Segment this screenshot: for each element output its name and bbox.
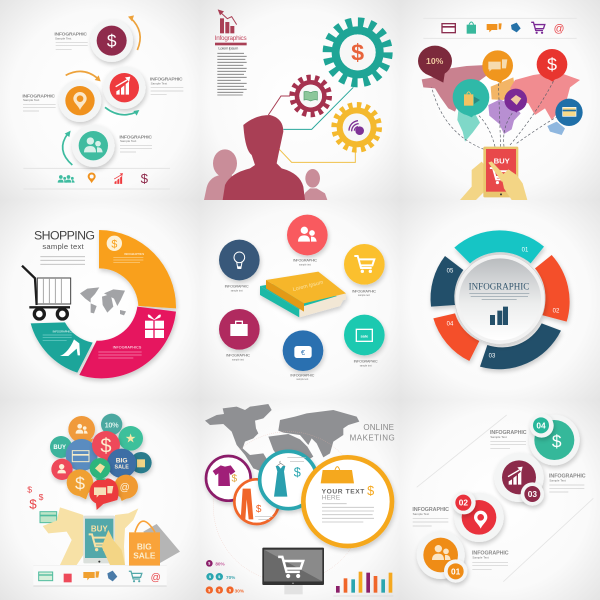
bubble: dollar: $ — [547, 55, 557, 75]
segment 02 — [535, 255, 570, 322]
label 03 — [549, 474, 586, 492]
bubble: dollar red: $ — [100, 435, 112, 457]
arrow: orange top — [128, 15, 140, 50]
circle: dollar: $ — [107, 31, 117, 51]
label: INFOGRAPHIC — [293, 259, 317, 263]
circle: dress: $ — [294, 466, 301, 480]
silhouette: main person — [223, 115, 305, 200]
shopping bags: SALE — [133, 551, 156, 561]
bubble: dollar — [537, 49, 567, 82]
tablet: BUY — [91, 525, 108, 534]
bubble: buy: BUY — [53, 445, 66, 451]
icon: shopping cart — [22, 266, 71, 319]
bubble: big sale — [107, 449, 136, 478]
book stack — [260, 272, 346, 317]
label — [226, 354, 250, 361]
legend — [206, 560, 245, 594]
panel: gears and silhouettes — [200, 0, 400, 200]
segment 04: 04 — [447, 321, 454, 327]
bubble: handshake — [504, 89, 527, 113]
circle 03: 03 — [528, 489, 537, 499]
text block: Lorem Ipsum — [218, 46, 239, 51]
icon row: $ — [141, 171, 149, 186]
world map — [205, 404, 359, 472]
label 1 — [54, 32, 88, 50]
connector lines — [268, 87, 355, 162]
segment: pink — [79, 307, 176, 378]
bubble: dollar orange — [67, 469, 93, 499]
label 01: Sample Text — [472, 556, 489, 560]
segment 05 — [431, 256, 463, 307]
label 4: Sample Text — [120, 139, 137, 143]
legend: $ — [208, 588, 210, 592]
label 2: INFOGRAPHIC — [150, 77, 183, 83]
gear: maroon book — [292, 78, 329, 114]
label 3 — [22, 93, 56, 111]
bubble: big sale: BIG — [116, 457, 128, 464]
label 03: INFOGRAPHIC — [549, 474, 586, 480]
bubble: 10%: 10% — [105, 420, 119, 429]
circle 01 — [417, 531, 467, 583]
label 01: INFOGRAPHIC — [472, 551, 509, 557]
bubble: bag — [453, 79, 489, 117]
label: INFOGRAPHIC — [226, 354, 250, 358]
label: INFOGRAPHIC — [352, 289, 376, 293]
circle: pin — [59, 79, 101, 122]
label 1: INFOGRAPHIC — [54, 32, 87, 38]
segment: pink: INFOGRAPHICS — [113, 345, 142, 349]
dollar signs: $ — [27, 485, 32, 495]
bubble: star: ★ — [125, 432, 136, 446]
circle 04: 04 — [536, 420, 546, 430]
circle: trousers: $ — [256, 504, 262, 515]
gear: yellow signal — [335, 106, 378, 149]
monitor — [262, 548, 324, 594]
segment 04 — [433, 313, 479, 361]
legend: 80% — [215, 561, 226, 566]
label 2 — [150, 77, 183, 94]
label 4 — [119, 134, 152, 152]
bubble: chat heart — [89, 478, 119, 510]
segment: orange: INFOGRAPHICS — [124, 252, 144, 256]
label: sample text — [232, 358, 244, 361]
legend: $ — [218, 588, 220, 592]
circle: shirt — [206, 456, 251, 501]
icon row — [442, 22, 564, 35]
bubble: person — [51, 459, 73, 480]
bubble: at sign: @ — [120, 482, 130, 493]
circle: euro case — [283, 330, 323, 371]
label: sample text — [360, 364, 372, 367]
circle 02: 02 — [459, 498, 468, 508]
centre hub: INFOGRAPHIC — [469, 281, 529, 291]
world map — [422, 65, 580, 142]
text block — [217, 46, 247, 95]
circle: trousers — [234, 479, 279, 524]
panel: circles around a book — [200, 200, 400, 400]
book stack: Lorem Ipsum — [292, 280, 324, 293]
segment: teal: INFOGRAPHICS — [53, 329, 73, 333]
label: sample text — [299, 263, 311, 266]
label 04: Sample Text — [490, 435, 507, 439]
segment 01 — [454, 230, 544, 263]
arrow: orange middle — [66, 71, 101, 81]
segment 01: 01 — [522, 248, 529, 254]
silhouette: right person — [302, 169, 327, 200]
circle: chart — [103, 66, 146, 109]
label 01 — [472, 551, 509, 570]
segment 05: 05 — [447, 269, 454, 275]
heading bar — [215, 43, 247, 45]
circle: your text here — [303, 457, 392, 546]
shopping bags — [129, 521, 180, 566]
label: INFOGRAPHIC — [354, 360, 378, 364]
circle: briefcase — [219, 309, 260, 350]
segment 02: 02 — [553, 309, 560, 315]
legend: 70% — [226, 575, 236, 580]
bubble: dollar red — [92, 431, 120, 463]
legend: $ — [208, 562, 210, 566]
circle: people — [287, 215, 328, 255]
label 02: INFOGRAPHIC — [412, 507, 449, 513]
chart icon — [218, 9, 237, 33]
title — [350, 423, 395, 443]
centre hub — [455, 254, 545, 344]
circle 01: 01 — [451, 566, 461, 576]
label: sample text — [296, 378, 309, 381]
bubble: 10% — [101, 414, 122, 435]
card — [40, 512, 57, 523]
bubble: people — [68, 416, 95, 447]
bubble: at sign — [114, 475, 138, 501]
circle: people — [72, 124, 115, 167]
segment 03 — [480, 323, 561, 369]
label 02: Sample Text — [413, 512, 429, 516]
circle: your text here: YOUR TEXT — [322, 488, 364, 495]
label — [352, 289, 376, 297]
bubble: buy — [50, 436, 72, 458]
hands — [43, 507, 138, 565]
right hand — [488, 161, 527, 200]
legend: $ — [229, 588, 231, 592]
phone — [483, 147, 518, 197]
gear: teal dollar: $ — [351, 40, 364, 66]
bubble: 10%: 10% — [426, 56, 444, 66]
gear: teal dollar — [328, 23, 387, 82]
label: sample text — [231, 289, 243, 292]
label 03: Sample Text — [549, 479, 566, 483]
bar chart — [333, 572, 393, 596]
circle: dress — [260, 451, 317, 509]
silhouette: left person — [204, 149, 242, 200]
arrow: teal middle — [105, 107, 139, 116]
world map — [80, 287, 126, 315]
dotted orbit — [213, 432, 363, 582]
circle 04: $ — [552, 431, 562, 451]
bubble: chat — [482, 50, 513, 83]
circle: your text here: HERE — [322, 495, 341, 502]
shopping bags: BIG — [137, 541, 152, 551]
bubble: bag — [130, 452, 152, 473]
bubble: card — [66, 439, 98, 471]
panel: circular process infographic — [0, 0, 200, 200]
label 04 — [490, 430, 527, 449]
circle: euro case: € — [301, 348, 305, 357]
icon row: @ — [554, 23, 564, 35]
panel: online marketing — [200, 400, 400, 600]
circle: your text here: $ — [367, 484, 374, 498]
segment: orange: $ — [111, 238, 117, 250]
bubble: star — [118, 426, 143, 451]
dollar signs: $ — [39, 492, 44, 502]
finger hand — [102, 530, 125, 565]
circle: dollar — [90, 19, 133, 62]
panel: balloons over tablet — [0, 400, 200, 600]
panel: world shopping map — [400, 0, 600, 200]
icon row — [39, 571, 161, 583]
dashed connectors — [432, 78, 560, 149]
label 04: INFOGRAPHIC — [490, 430, 527, 436]
label — [354, 360, 378, 367]
title: SHOPPING — [34, 228, 95, 242]
circle: sale board — [344, 315, 385, 355]
segment: teal — [31, 322, 93, 373]
segment: orange — [99, 230, 176, 308]
bubble: big sale: SALE — [115, 465, 129, 471]
subtitle: sample text — [42, 242, 85, 251]
label: sample text — [358, 294, 370, 297]
icon row: @ — [151, 572, 161, 583]
icon row — [58, 171, 149, 186]
title rule lines — [40, 257, 85, 264]
circle 04 — [529, 414, 580, 465]
bubble: card — [555, 99, 583, 126]
bubble: handshake — [90, 458, 110, 483]
label: INFOGRAPHIC — [290, 373, 315, 377]
dollar signs: $ — [29, 497, 37, 512]
label — [293, 259, 317, 266]
circle 02 — [452, 491, 504, 542]
dollar signs — [27, 485, 44, 512]
label — [290, 373, 315, 381]
legend: 30% — [235, 588, 245, 593]
circle: shirt: $ — [232, 473, 238, 484]
title: ONLINE — [363, 423, 394, 432]
panel: segmented ring — [400, 200, 600, 400]
label 4: INFOGRAPHIC — [119, 134, 152, 140]
circle: sale board: sale — [360, 333, 369, 338]
legend: $ — [218, 575, 220, 579]
panel: numbered diagonal steps — [400, 400, 600, 600]
circle: cart — [344, 244, 385, 285]
bubble: dollar orange: $ — [75, 473, 85, 493]
tablet — [83, 516, 115, 563]
circle: light bulb — [219, 240, 260, 280]
bubble: 10% — [418, 46, 452, 83]
heading: Infographics — [215, 35, 247, 42]
arrow: teal bottom — [63, 131, 72, 165]
label: INFOGRAPHIC — [225, 285, 249, 289]
label 3: Sample Text — [23, 98, 40, 102]
title: MAKETING — [350, 434, 395, 443]
label 3: INFOGRAPHIC — [22, 93, 55, 99]
legend: $ — [209, 575, 211, 579]
label 1: Sample Text — [55, 36, 72, 40]
panel: shopping donut chart — [0, 200, 200, 400]
label 2: Sample Text — [151, 81, 167, 85]
circle 03 — [494, 453, 544, 506]
left hand — [460, 162, 487, 200]
label — [225, 285, 249, 292]
phone: BUY — [494, 157, 510, 166]
label 02 — [412, 507, 449, 526]
segment 03: 03 — [489, 353, 496, 359]
